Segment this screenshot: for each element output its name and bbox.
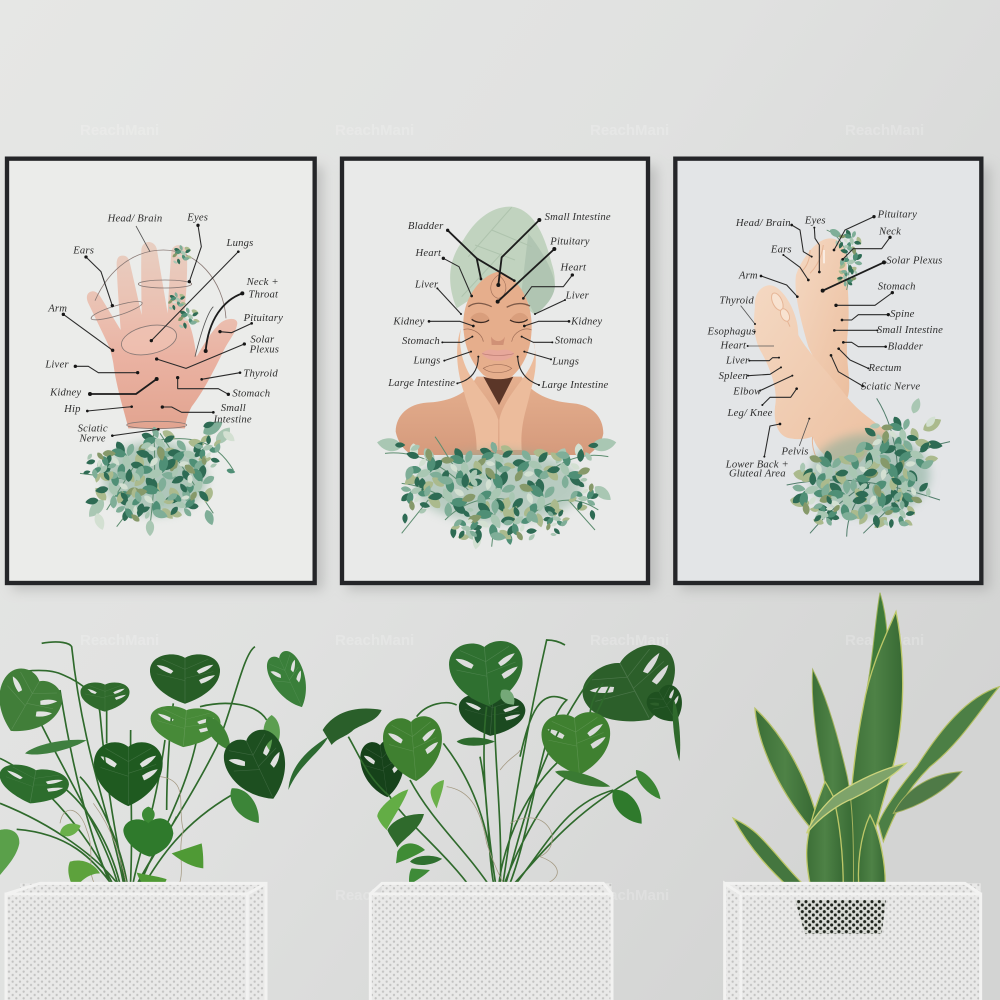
callout: Head / Brain: Head/ Brain bbox=[107, 213, 162, 224]
callout: Sciatic Nerve bbox=[78, 424, 160, 445]
callout: Kidney left: Kidney bbox=[392, 317, 425, 328]
poster frame bbox=[675, 159, 981, 583]
foliage cluster bbox=[782, 397, 950, 537]
callout: Kidney right bbox=[523, 317, 602, 328]
callout: Rectum bbox=[837, 347, 902, 374]
callout: Neck bbox=[841, 226, 901, 261]
callout: Spine bbox=[841, 309, 915, 321]
callout: Heart right: Heart bbox=[559, 262, 587, 273]
callout: Lungs right bbox=[523, 351, 579, 367]
callout: Small Intestine: Small bbox=[221, 403, 246, 414]
callout: Heart left: Heart bbox=[414, 248, 442, 259]
callout: Liver left: Liver bbox=[414, 280, 439, 291]
callout: Stomach bbox=[834, 281, 916, 307]
watermarks: ReachMani bbox=[590, 632, 669, 649]
callout: Pituitary bbox=[496, 237, 590, 304]
callout: Lungs left: Lungs bbox=[413, 355, 440, 366]
callout: Stomach left: Stomach bbox=[402, 336, 440, 347]
callout: Hip: Hip bbox=[63, 404, 81, 415]
callout: Liver left bbox=[414, 280, 462, 315]
callout: Ears bbox=[72, 246, 114, 307]
watermarks: ReachMani bbox=[590, 122, 669, 139]
callout: Solar Plexus: Solar bbox=[250, 334, 275, 345]
watermarks: ReachMani bbox=[590, 887, 669, 904]
callout: Neck and Throat bbox=[195, 277, 279, 357]
callout: Heart right bbox=[522, 262, 587, 300]
monstera leaves bbox=[0, 639, 682, 895]
callout: Pelvis: Pelvis bbox=[780, 446, 809, 457]
callout: Elbow bbox=[732, 375, 793, 398]
callout: Pelvis bbox=[780, 418, 810, 457]
callout: Bladder: Bladder bbox=[888, 341, 924, 352]
callout: Sciatic Nerve bbox=[830, 354, 920, 392]
foliage garland bbox=[376, 436, 617, 555]
planters and plants bbox=[0, 593, 999, 1000]
callout: Liver right: Liver bbox=[565, 290, 590, 301]
callout: Lower Back and Gluteal Area bbox=[725, 423, 789, 480]
callout: Arm: Arm bbox=[738, 271, 758, 282]
callout: Spine: Spine bbox=[890, 309, 915, 320]
planter left bbox=[5, 883, 267, 1000]
callout: Neck and Throat: Throat bbox=[249, 289, 279, 300]
callout: Small Intestine: Small Intestine bbox=[877, 325, 943, 336]
callout: Bladder bbox=[408, 221, 516, 282]
callout: Eyes bbox=[804, 216, 826, 273]
callout: Ears bbox=[770, 244, 810, 281]
callout: Arm bbox=[47, 303, 114, 352]
callout: Rectum: Rectum bbox=[868, 363, 902, 374]
monstera plant left and centre bbox=[0, 636, 693, 895]
callout: Thyroid bbox=[200, 369, 278, 381]
callout: Heart left bbox=[414, 248, 473, 297]
callout: Pituitary bbox=[218, 313, 283, 333]
callout: Kidney bbox=[49, 377, 159, 398]
callout: Spleen: Spleen bbox=[719, 371, 748, 382]
aerial roots bbox=[60, 750, 557, 892]
callout: Spleen bbox=[719, 366, 782, 382]
callout: Heart bbox=[719, 341, 774, 352]
snake plant bbox=[733, 593, 999, 893]
callout: Solar Plexus bbox=[155, 334, 279, 368]
callout: Liver: Liver bbox=[725, 355, 750, 366]
callout: Sciatic Nerve: Sciatic Nerve bbox=[861, 381, 920, 392]
callout: Sciatic Nerve: Sciatic bbox=[78, 424, 108, 435]
callout: Bladder: Bladder bbox=[408, 221, 444, 232]
upper foot bbox=[795, 238, 849, 398]
shoulders and neck bbox=[396, 377, 603, 455]
callout: Leg / Knee: Leg/ Knee bbox=[726, 408, 773, 419]
watermarks: ReachMani bbox=[845, 632, 924, 649]
callout: Small Intestine bbox=[833, 325, 943, 336]
facial features bbox=[463, 275, 532, 373]
callout: Eyes: Eyes bbox=[804, 216, 826, 227]
callout: Small Intestine bbox=[496, 212, 611, 287]
callout: Arm bbox=[738, 271, 799, 298]
hands on face bbox=[457, 328, 536, 450]
callout: Stomach right: Stomach bbox=[555, 336, 593, 347]
callout: Small Intestine: Small Intestine bbox=[545, 212, 611, 223]
callout: Large Intestine right bbox=[517, 356, 609, 391]
callout: Ears: Ears bbox=[72, 246, 94, 257]
callout: Arm: Arm bbox=[47, 303, 67, 314]
towel turban bbox=[450, 207, 555, 315]
callout: Kidney right: Kidney bbox=[570, 317, 602, 328]
foliage bouquet bbox=[80, 417, 237, 536]
callout: Kidney: Kidney bbox=[49, 387, 81, 398]
callout: Pituitary bbox=[833, 210, 917, 251]
callout: Kidney left bbox=[392, 317, 475, 328]
callout: Liver right bbox=[534, 290, 590, 315]
callout: Eyes bbox=[186, 213, 208, 283]
planter centre bbox=[370, 883, 613, 1000]
finger foliage sprigs bbox=[167, 245, 200, 329]
callout: Leg / Knee bbox=[726, 387, 798, 419]
callout: Lungs right: Lungs bbox=[551, 356, 579, 367]
callout: Elbow: Elbow bbox=[732, 387, 762, 398]
callout: Neck: Neck bbox=[878, 226, 901, 237]
callout: Pituitary: Pituitary bbox=[549, 237, 590, 248]
watermarks: ReachMani bbox=[80, 632, 159, 649]
callout: Stomach bbox=[176, 376, 270, 400]
callout: Liver bbox=[725, 355, 780, 366]
callout: Large Intestine right: Large Intestine bbox=[541, 380, 609, 391]
watermarks bbox=[80, 122, 924, 904]
callout: Liver: Liver bbox=[44, 359, 69, 370]
callout: Stomach left bbox=[402, 336, 473, 347]
callout: Pituitary: Pituitary bbox=[243, 313, 283, 324]
callout: Heart: Heart bbox=[719, 341, 747, 352]
panel: feet reflexology poster bbox=[675, 159, 981, 583]
callout: Sciatic Nerve: Nerve bbox=[79, 434, 106, 445]
callout: Lower Back and Gluteal Area: Lower Back + bbox=[725, 459, 789, 470]
callout: Bladder bbox=[842, 341, 924, 352]
lower foot bbox=[754, 285, 887, 467]
watermarks: ReachMani bbox=[80, 122, 159, 139]
neck shadow bbox=[483, 377, 513, 405]
callout: Head / Brain bbox=[107, 213, 162, 252]
poster frame bbox=[342, 159, 648, 583]
hand illustration bbox=[87, 242, 237, 428]
toe shading bbox=[769, 245, 824, 458]
poster frame bbox=[7, 159, 315, 583]
callout: Head / Brain bbox=[735, 218, 813, 258]
callout: Small Intestine bbox=[161, 403, 252, 426]
callout: Hip bbox=[63, 404, 133, 415]
callout: Thyroid bbox=[719, 296, 756, 325]
callout: Small Intestine: Intestine bbox=[213, 415, 252, 426]
callout: Eyes: Eyes bbox=[186, 213, 208, 224]
top foot sprig bbox=[827, 224, 868, 290]
watermarks: ReachMani bbox=[845, 122, 924, 139]
callout: Thyroid: Thyroid bbox=[719, 296, 754, 307]
callout: Lungs bbox=[150, 238, 253, 342]
callout: Solar Plexus bbox=[821, 255, 942, 293]
callout: Head / Brain: Head/ Brain bbox=[735, 218, 791, 229]
callout: Pituitary: Pituitary bbox=[877, 210, 917, 221]
callout: Solar Plexus: Plexus bbox=[249, 345, 279, 356]
callout: Lower Back and Gluteal Area: Gluteal Area bbox=[729, 469, 786, 480]
callout: Esophagus: Esophagus bbox=[707, 327, 756, 338]
planter right bbox=[724, 883, 982, 1000]
stems bbox=[0, 640, 637, 892]
callout: Lungs: Lungs bbox=[226, 238, 253, 249]
callout: Stomach: Stomach bbox=[232, 389, 270, 400]
callout: Neck and Throat: Neck + bbox=[246, 277, 279, 288]
palm zone ellipses bbox=[90, 250, 226, 429]
callout: Large Intestine left: Large Intestine bbox=[387, 378, 455, 389]
behind-leaf layer bbox=[358, 636, 693, 800]
watermarks: ReachMani bbox=[335, 122, 414, 139]
watermarks: ReachMani bbox=[335, 887, 414, 904]
callout: Large Intestine left bbox=[387, 356, 479, 389]
callout: Thyroid: Thyroid bbox=[243, 369, 278, 380]
callout: Liver bbox=[44, 359, 139, 374]
watermarks: ReachMani bbox=[335, 632, 414, 649]
panel: face reflexology poster bbox=[342, 159, 648, 583]
callout: Lungs left bbox=[413, 351, 472, 366]
callout: Stomach right bbox=[521, 336, 593, 347]
frame shadows bbox=[12, 166, 990, 590]
callout: Stomach: Stomach bbox=[878, 281, 916, 292]
panel: hand reflexology poster bbox=[7, 159, 315, 583]
callout: Solar Plexus: Solar Plexus bbox=[886, 255, 942, 266]
callout: Ears: Ears bbox=[770, 244, 792, 255]
face bbox=[463, 272, 532, 379]
